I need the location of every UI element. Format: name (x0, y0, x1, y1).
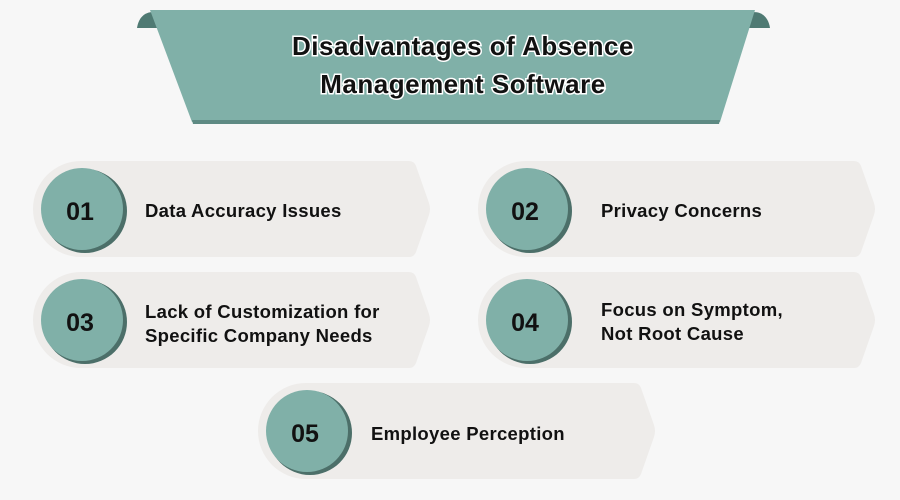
card 04 (478, 272, 875, 368)
card 02 (478, 161, 875, 257)
card 05: Employee Perception (371, 423, 565, 444)
title line 2: Management Software (320, 69, 606, 99)
card 03 (33, 272, 430, 368)
card 01 (33, 161, 430, 257)
title: Disadvantages of Absence (292, 31, 634, 61)
card 02: Privacy Concerns (601, 200, 762, 221)
title banner (137, 10, 770, 146)
card 04: Focus on Symptom, (601, 299, 783, 320)
card 04: Not Root Cause (601, 323, 744, 344)
card 05: 05 (291, 420, 319, 448)
card 03: Lack of Customization for (145, 301, 380, 322)
card 05 (258, 383, 655, 479)
card 03: Specific Company Needs (145, 325, 373, 346)
card 03: 03 (66, 309, 94, 337)
card 02: 02 (511, 198, 539, 226)
card 01: Data Accuracy Issues (145, 200, 342, 221)
card 01: 01 (66, 198, 94, 226)
card 04: 04 (511, 309, 539, 337)
